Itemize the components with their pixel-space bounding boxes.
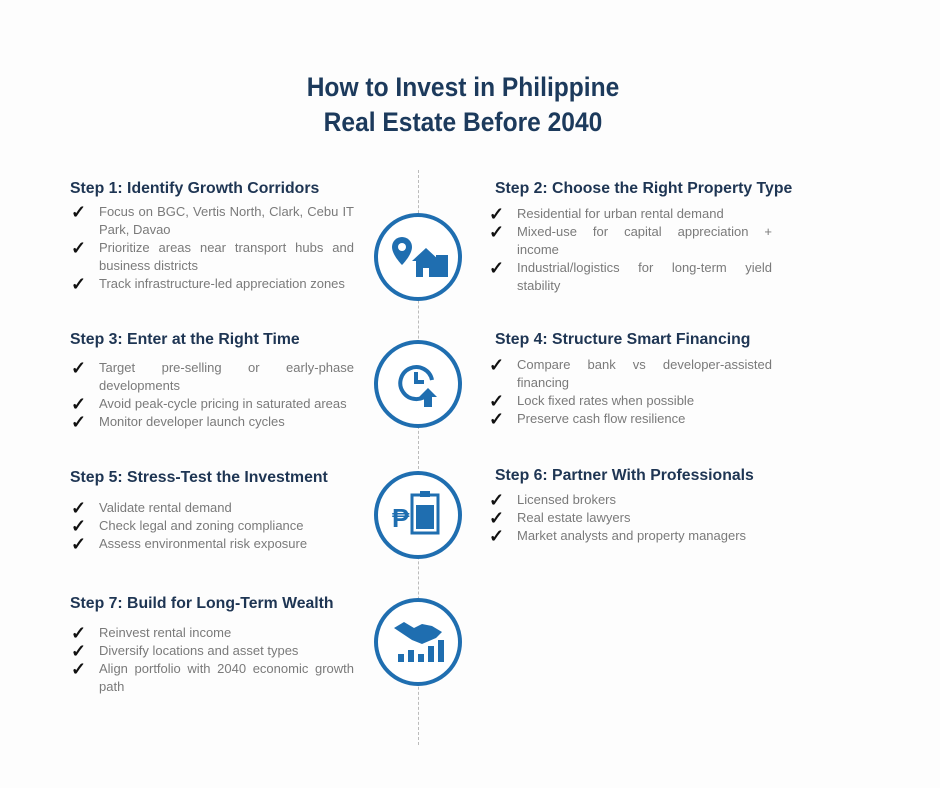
list: step 1: Prioritize areas near transport hubs and [99,240,354,255]
list: step 2: Mixed-use for capital appreciation + [517,224,772,239]
icon: peso calculator: ₱ [392,503,410,533]
list: step 5 [73,500,307,551]
list: step 3: Avoid peak-cycle pricing in saturated areas [99,396,347,411]
list: step 6: Licensed brokers [517,492,616,507]
heading: step 2: Step 2: Choose the Right Property Type [495,180,792,197]
list: step 2: Industrial/logistics for long-term yield [517,260,772,275]
list: step 6: Real estate lawyers [517,510,630,525]
list: step 1: Track infrastructure-led appreciation zones [99,276,345,291]
title: Real Estate Before 2040 [324,107,602,137]
list: step 3 [73,360,354,429]
list: step 2: Residential for urban rental demand [517,206,724,221]
list: step 7: path [99,679,124,694]
list: step 6: Market analysts and property managers [517,528,746,543]
icon: location and house [374,213,462,301]
list: step 3: Monitor developer launch cycles [99,414,285,429]
list: step 5: Check legal and zoning compliance [99,518,304,533]
list: step 1: business districts [99,258,198,273]
heading: step 7: Step 7: Build for Long-Term Wealth [70,595,334,612]
icon: peso calculator [374,471,462,559]
list: step 1: Focus on BGC, Vertis North, Clark, Cebu IT [99,204,354,219]
list: step 4: Preserve cash flow resilience [517,411,685,426]
list: step 7: Reinvest rental income [99,625,231,640]
list: step 5: Assess environmental risk exposure [99,536,307,551]
list: step 4: Compare bank vs developer-assisted [517,357,772,372]
list: step 2 [491,206,772,293]
list: step 7 [73,625,354,694]
heading: step 6: Step 6: Partner With Professionals [495,467,754,484]
icon: clock with arrow [374,340,462,428]
heading: step 1: Step 1: Identify Growth Corridors [70,180,319,197]
list: step 4: Lock fixed rates when possible [517,393,694,408]
list: step 5: Validate rental demand [99,500,232,515]
heading: step 3: Step 3: Enter at the Right Time [70,331,300,348]
title [307,72,619,137]
heading: step 5: Step 5: Stress-Test the Investment [70,469,328,486]
list: step 2: stability [517,278,560,293]
list: step 1 [73,204,354,291]
list: step 1: Park, Davao [99,222,171,237]
heading: step 4: Step 4: Structure Smart Financing [495,331,750,348]
list: step 3: Target pre-selling or early-phase [99,360,354,375]
title: How to Invest in Philippine [307,72,619,102]
list: step 6 [491,492,746,543]
list: step 4: financing [517,375,569,390]
list: step 2: income [517,242,559,257]
list: step 7: Diversify locations and asset types [99,643,298,658]
icon: handshake with bars [374,598,462,686]
list: step 4 [491,357,772,426]
list: step 3: developments [99,378,180,393]
list: step 7: Align portfolio with 2040 economic growth [99,661,354,676]
